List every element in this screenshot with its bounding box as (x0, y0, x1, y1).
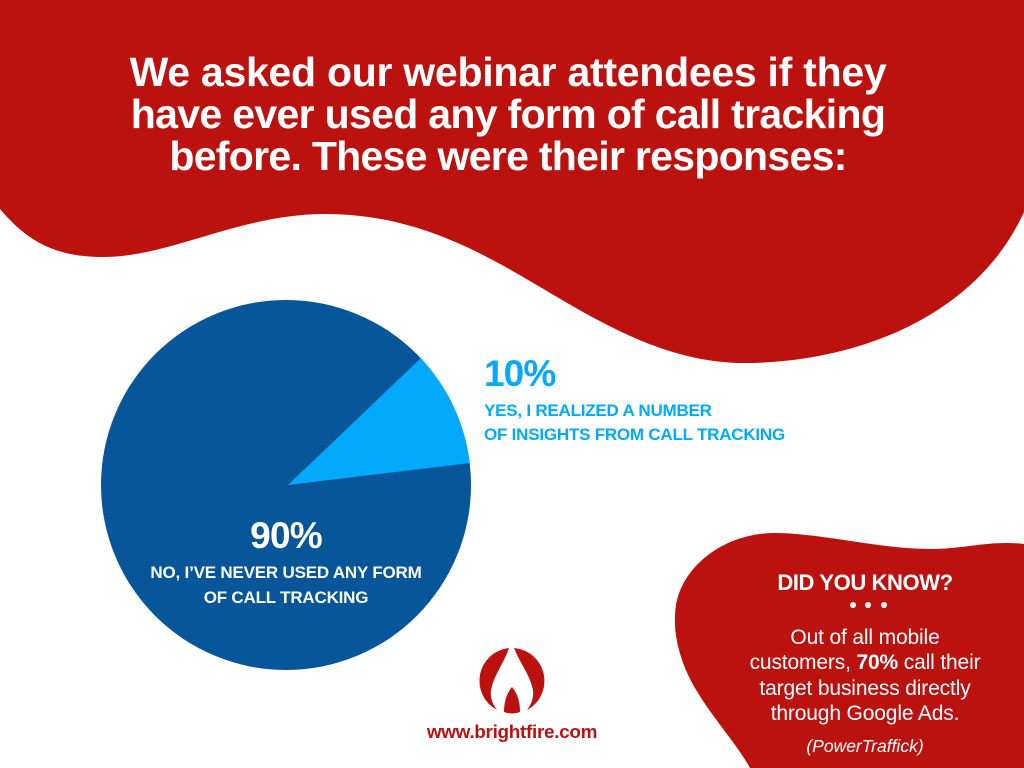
title: before. These were their responses: (169, 133, 847, 179)
pie slice: 90% (101, 300, 471, 670)
pie slice: 10% (288, 358, 470, 485)
source: (PowerTraffick) (806, 736, 924, 756)
label: yes: OF INSIGHTS FROM CALL TRACKING (484, 424, 785, 444)
pie chart (101, 300, 471, 670)
icon: BrightFire flame logo (479, 648, 544, 714)
body text: customers, 70% call their (750, 651, 980, 674)
title (130, 49, 886, 179)
body text: through Google Ads. (771, 702, 959, 725)
label: no: NO, I’VE NEVER USED ANY FORM (150, 563, 422, 582)
callout: 10% yes (484, 353, 785, 444)
header red wave (0, 0, 1024, 363)
body text: target business directly (759, 677, 971, 700)
title: We asked our webinar attendees if they (130, 49, 886, 95)
title: have ever used any form of call tracking (131, 91, 885, 137)
heading: DID YOU KNOW? (777, 570, 953, 595)
label: no: OF CALL TRACKING (204, 588, 368, 607)
label: yes: YES, I REALIZED A NUMBER (484, 401, 712, 420)
value: 90%: 90% (250, 515, 322, 556)
label: yes (484, 401, 785, 444)
dots (850, 602, 887, 608)
website link text: www.brightfire.com (427, 722, 597, 743)
body text: Out of all mobile (790, 626, 940, 649)
did you know blob (675, 533, 1024, 768)
value: 10%: 10% (484, 353, 555, 394)
label: no (150, 563, 422, 607)
body text (750, 626, 980, 725)
callout: 90% no (150, 515, 422, 607)
panel: did you know (750, 570, 980, 756)
